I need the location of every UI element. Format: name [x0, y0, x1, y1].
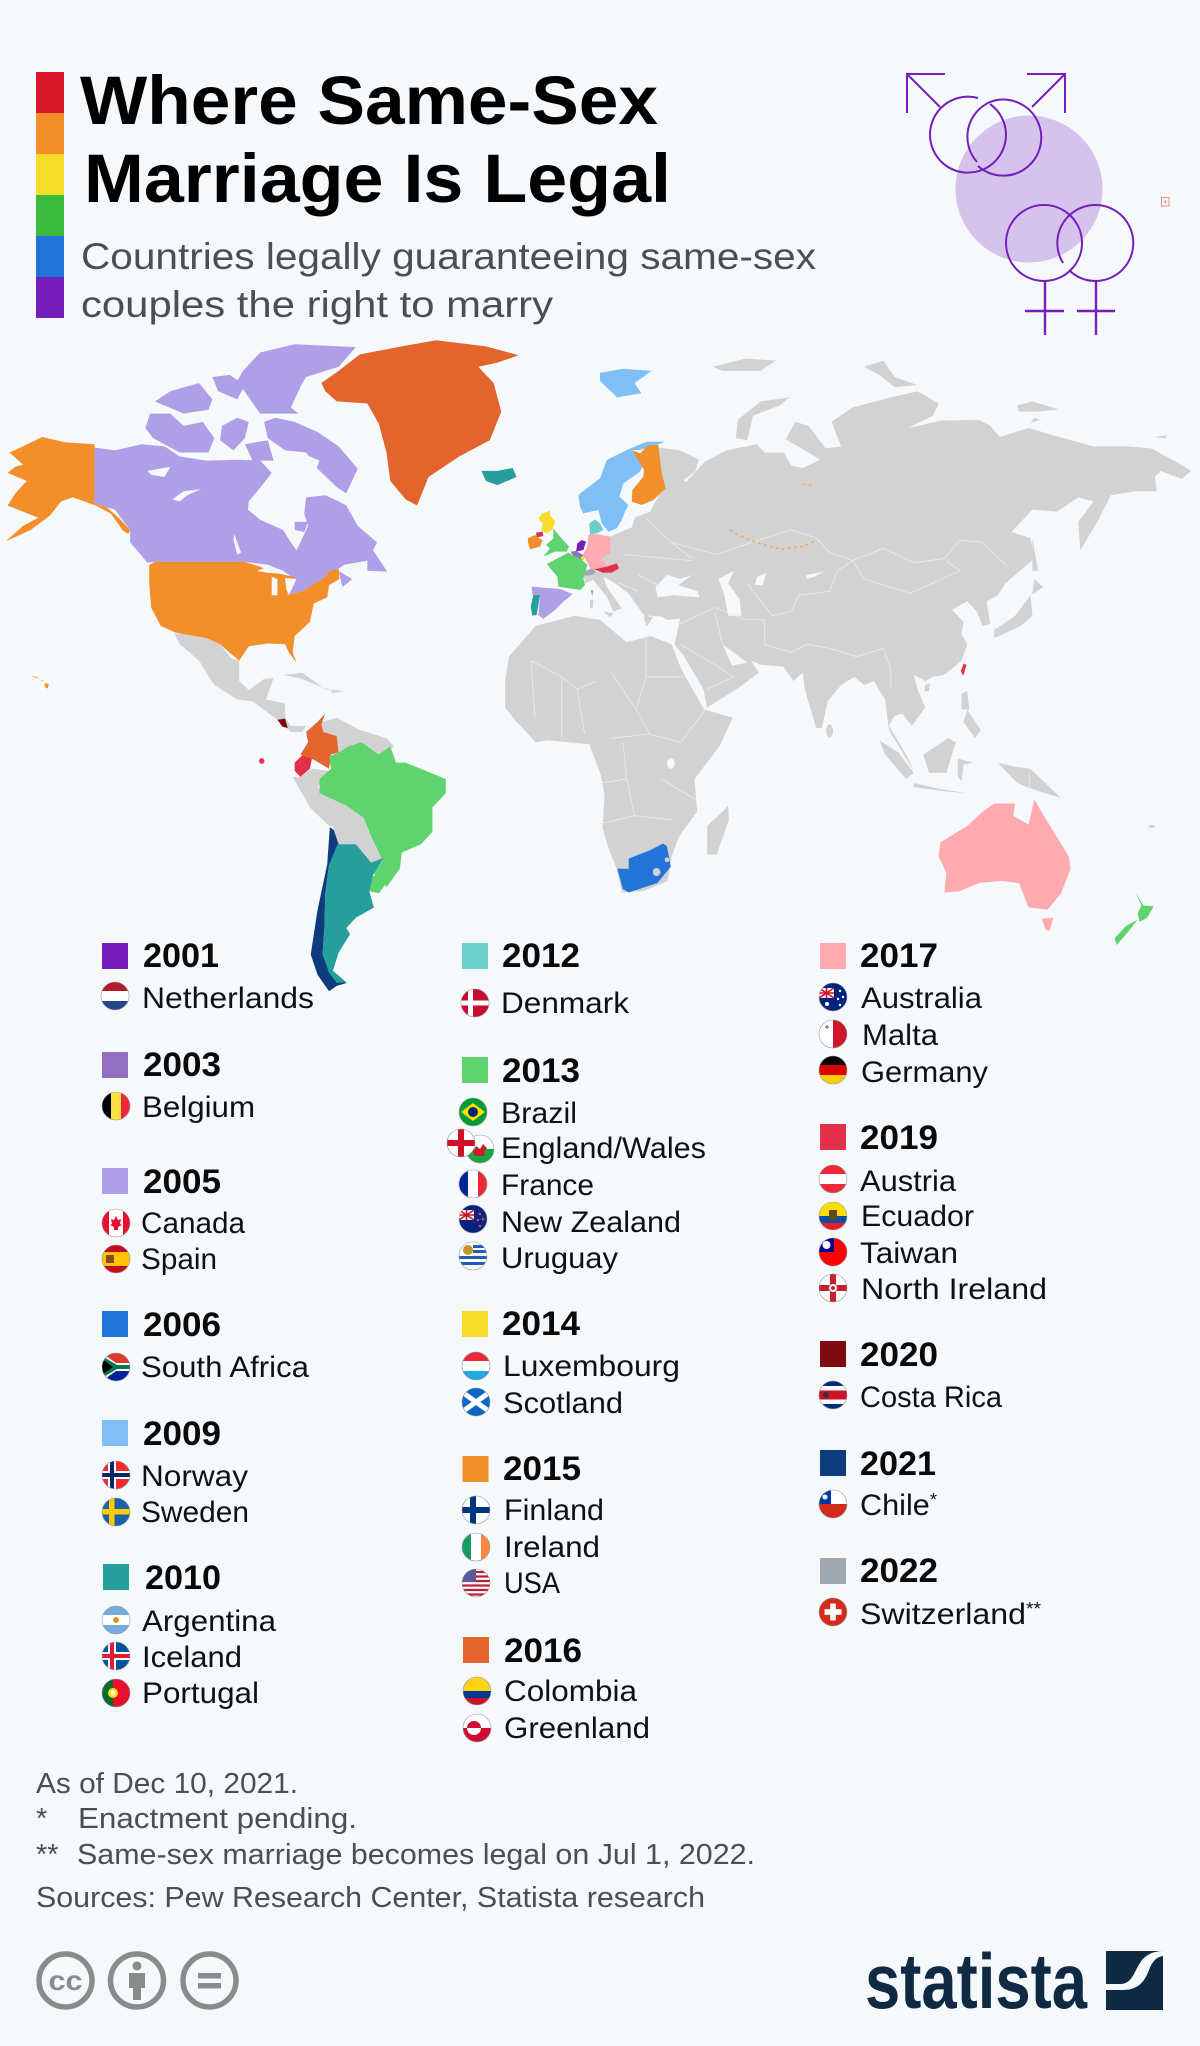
Africa: [505, 616, 733, 892]
Argentina: [323, 844, 384, 983]
icon: attribution: [110, 1954, 164, 2007]
Colombia: [462, 1676, 637, 1706]
Sweden: [102, 1498, 248, 1526]
Finland: [462, 1496, 602, 1524]
legend: 2014: 2014: [502, 1305, 580, 1343]
legend: 2012: 2012: [502, 937, 580, 975]
legend: 2013: 2013: [502, 1052, 580, 1090]
legend: 2012: [460, 943, 629, 1018]
icon: creative commons: [39, 1954, 92, 2007]
Corsica: [591, 590, 593, 597]
legend: 2009: 2009: [143, 1415, 221, 1453]
subtitle: Countries legally guaranteeing same-sex: [81, 236, 817, 277]
Austria: Austria: [860, 1165, 956, 1198]
subtitle: couples the right to marry: [81, 284, 554, 325]
Switzerland: Switzerland: [860, 1598, 1015, 1631]
legend: 2017: 2017: [860, 937, 938, 975]
Argentina: Argentina: [142, 1605, 276, 1638]
Spain: [532, 587, 573, 619]
title: Marriage Is Legal: [84, 140, 671, 217]
inland seas: [619, 473, 824, 769]
Uruguay: Uruguay: [501, 1242, 618, 1275]
Portugal: [531, 595, 540, 616]
Canadian lakes: [147, 452, 320, 554]
northern South America: [321, 718, 394, 757]
Ireland: [462, 1532, 598, 1562]
Canada: [95, 344, 387, 595]
legend: 2017: [819, 937, 988, 1089]
Iceland: [481, 468, 517, 485]
Greenland: Greenland: [504, 1712, 650, 1745]
title: Where Same-Sex: [80, 62, 658, 139]
Mexico and Central America: [174, 633, 306, 732]
Taiwan: [961, 664, 967, 676]
legend: 2019: [819, 1119, 1047, 1306]
icon: gender symbols: [907, 74, 1133, 335]
footnotes: [36, 1768, 755, 1871]
legend: 2020: 2020: [860, 1336, 938, 1374]
Iceland: Iceland: [142, 1641, 242, 1674]
Greenland: [321, 340, 518, 506]
legend: 2015: 2015: [503, 1450, 581, 1488]
Scotland: Scotland: [503, 1387, 623, 1420]
Netherlands: Netherlands: [142, 982, 314, 1015]
legend: 2020: [819, 1336, 1002, 1414]
Colombia: Colombia: [504, 1675, 637, 1708]
USA: [6, 437, 817, 688]
Finland: [632, 445, 666, 505]
Netherlands: [100, 982, 313, 1010]
icon: no derivatives: [183, 1954, 236, 2007]
Germany: [583, 534, 612, 572]
France: [458, 1170, 593, 1198]
footnotes: *: [36, 1803, 47, 1835]
legend: 2014: [462, 1305, 680, 1420]
Austria: [594, 563, 619, 573]
South Africa: South Africa: [141, 1351, 309, 1384]
rainbow bar: [36, 72, 64, 318]
Ireland: [528, 535, 543, 549]
Belgium: [571, 551, 583, 559]
Luxembourg: [581, 557, 584, 560]
New Zealand: New Zealand: [501, 1206, 681, 1239]
Taiwan: Taiwan: [860, 1237, 958, 1270]
Denmark: Denmark: [501, 987, 630, 1020]
Norway and Sweden: [578, 442, 665, 532]
title: [80, 62, 671, 217]
Brazil: [320, 742, 446, 887]
legend: 2021: [819, 1445, 937, 1522]
statista logo mark: [1106, 1951, 1163, 2010]
statista wordmark: statista: [865, 1937, 1087, 2025]
legend: 2010: [102, 1559, 276, 1710]
Brazil: [458, 1098, 575, 1126]
legend: 2022: 2022: [860, 1552, 938, 1590]
legend: 2001: [100, 943, 313, 1010]
legend: 2021: 2021: [860, 1445, 936, 1483]
Brazil: Brazil: [501, 1097, 577, 1130]
Belgium: Belgium: [142, 1091, 255, 1124]
France: [547, 553, 587, 590]
legend: 2003: [102, 1046, 255, 1124]
Chile: Chile: [860, 1489, 928, 1522]
footnotes: Enactment pending.: [78, 1803, 357, 1835]
legend: 2010: 2010: [145, 1559, 221, 1597]
Ecuador: Ecuador: [861, 1200, 974, 1233]
Portugal: Portugal: [142, 1677, 259, 1710]
footnotes: Same-sex marriage becomes legal on Jul 1, 2022.: [77, 1839, 755, 1871]
Europe grey: [583, 487, 700, 627]
Malta: [818, 1020, 938, 1048]
icon: creative commons: cc: [48, 1965, 82, 1996]
subtitle: [81, 236, 817, 325]
legend: 2013: [447, 1052, 706, 1275]
Switzerland: [583, 568, 597, 576]
legend: 2009: [102, 1415, 249, 1529]
sources: Sources: Pew Research Center, Statista research: [36, 1882, 705, 1914]
Austria: [818, 1164, 956, 1194]
Switzerland: **: [1026, 1599, 1041, 1619]
legend: 2006: [102, 1306, 309, 1384]
Denmark: [589, 519, 603, 535]
Taiwan: [819, 1237, 958, 1270]
country borders: [531, 518, 1029, 824]
land: Eurasia and grey countries: [174, 359, 1191, 892]
legend: 2016: 2016: [504, 1632, 582, 1670]
world map: [6, 340, 1191, 991]
small marker: [1162, 198, 1169, 206]
legend: 2005: 2005: [143, 1163, 221, 1201]
France: France: [501, 1169, 594, 1202]
Spain: Spain: [141, 1243, 217, 1276]
Australia: Australia: [861, 982, 982, 1015]
Australia: [939, 799, 1071, 931]
Canada: Canada: [141, 1207, 245, 1240]
legend: 2022: [819, 1552, 1041, 1631]
Chile: [311, 827, 347, 991]
Norway: [102, 1460, 248, 1493]
Ecuador: [259, 755, 312, 777]
Ireland: Ireland: [504, 1531, 600, 1564]
Great Lakes: [257, 566, 297, 595]
legend: 2005: [102, 1163, 245, 1276]
Greenland: [462, 1714, 648, 1742]
New Zealand: [458, 1204, 679, 1234]
Germany: Germany: [861, 1056, 988, 1089]
South Africa: [617, 843, 671, 892]
Chile: *: [930, 1490, 937, 1510]
Canada: [102, 1208, 245, 1238]
Norway: Norway: [141, 1460, 248, 1493]
Northern Ireland: [536, 532, 543, 538]
legend: 2016: [463, 1632, 650, 1745]
USA: USA: [504, 1567, 560, 1600]
Australia: [818, 982, 982, 1012]
Denmark: [460, 988, 629, 1018]
Sweden: Sweden: [141, 1496, 249, 1529]
Netherlands: [576, 540, 586, 552]
England and Wales: England/Wales: [501, 1132, 706, 1165]
legend: 2015: [462, 1450, 604, 1600]
Scotland: [462, 1388, 621, 1416]
Malta: Malta: [862, 1019, 938, 1052]
Costa Rica: [277, 719, 288, 728]
Scotland: [538, 511, 555, 533]
New Zealand: [1115, 892, 1154, 945]
Finland: Finland: [504, 1494, 604, 1527]
legend: 2006: 2006: [143, 1306, 221, 1344]
Colombia: [300, 714, 339, 769]
legend: 2001: 2001: [143, 937, 219, 975]
Chile: [819, 1489, 937, 1522]
Luxembourg: Luxembourg: [503, 1350, 680, 1383]
legend: 2003: 2003: [143, 1046, 221, 1084]
legend: 2019: 2019: [860, 1119, 938, 1157]
USA: [462, 1568, 560, 1598]
Spain: [102, 1243, 217, 1276]
Switzerland: [819, 1598, 1041, 1631]
North Ireland: North Ireland: [861, 1273, 1047, 1306]
Europe countries: [528, 442, 666, 619]
Svalbard: [600, 369, 652, 397]
England and Wales: [543, 528, 569, 557]
Iceland: [102, 1642, 240, 1670]
footnotes: **: [36, 1839, 59, 1871]
Uruguay: [369, 874, 386, 893]
Costa Rica: Costa Rica: [860, 1381, 1002, 1414]
footnotes: As of Dec 10, 2021.: [36, 1768, 298, 1800]
